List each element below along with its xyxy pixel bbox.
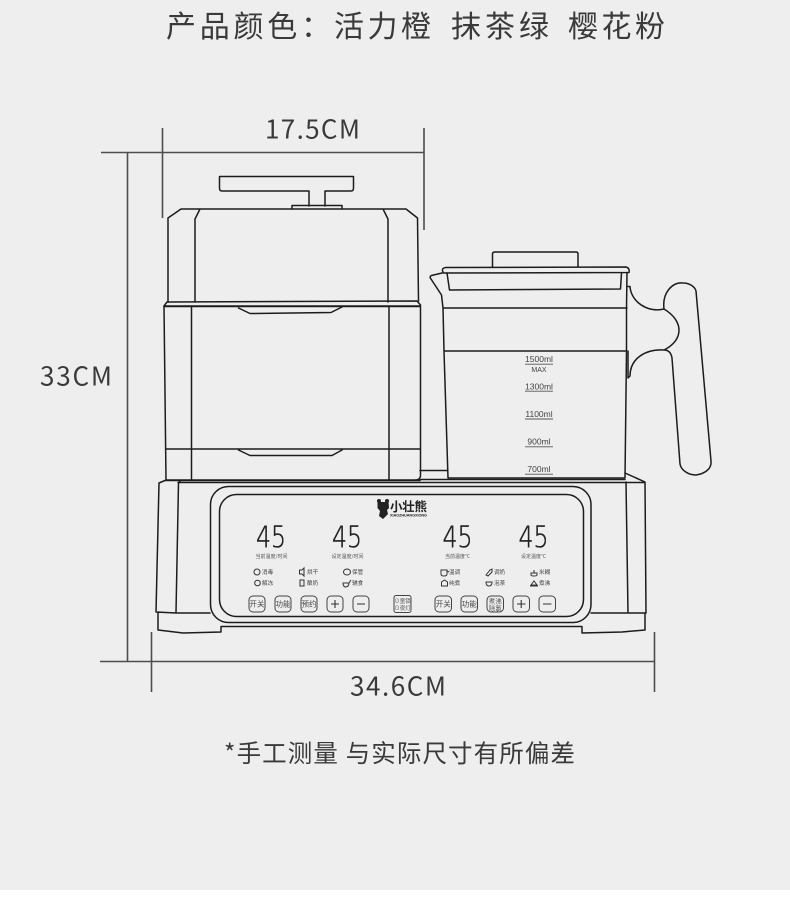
left control buttons: 预约 — [302, 598, 316, 610]
title: product colours: 抹茶绿 — [451, 2, 549, 46]
kettle lid — [442, 252, 629, 273]
measuring scale: 1100ml — [525, 409, 553, 419]
steamer lid — [168, 209, 418, 302]
control panel frame — [210, 486, 591, 622]
function labels: 酿奶 — [307, 579, 319, 587]
brand logo: XIAOZHUANGXIONG — [390, 514, 427, 518]
function labels: 米糊 — [539, 568, 551, 576]
function labels: 调奶 — [494, 568, 506, 576]
readout captions: 设定温度℃ — [521, 553, 546, 560]
title: product colours: 活力橙 — [334, 2, 431, 46]
function labels: 煮沸 — [539, 579, 551, 587]
function labels: 消毒 — [262, 568, 274, 576]
measuring scale: 1300ml — [525, 382, 553, 392]
base housing — [156, 470, 646, 633]
dimension label: total width 34.6CM: 34.6CM — [350, 666, 446, 704]
brand logo — [377, 496, 427, 519]
readout captions: 当前温度℃ — [445, 553, 470, 560]
function labels: 泡茶 — [494, 579, 506, 587]
steamer unit — [164, 176, 420, 480]
child lock and night light button — [394, 596, 411, 612]
readout captions: 设定温度/时间 — [332, 553, 363, 560]
measuring scale: 900ml — [527, 437, 551, 447]
function labels: 保管 — [352, 568, 364, 576]
temperature readouts — [256, 520, 548, 554]
note: manual measurement: *手工测量 与实际尺寸有所偏差 — [224, 735, 575, 770]
dimension lines — [100, 128, 654, 692]
kettle body — [430, 273, 627, 478]
temperature readouts: 45 — [332, 520, 362, 554]
measuring scale — [525, 354, 553, 474]
kettle handle — [628, 283, 711, 475]
left control buttons: 功能 — [276, 598, 291, 610]
temperature readouts: 45 — [442, 520, 472, 554]
brand logo: 小壮熊 — [390, 496, 427, 515]
function labels: 辅食 — [352, 579, 364, 587]
measuring scale: 1500ml — [525, 354, 553, 364]
function labels: 烘干 — [307, 568, 319, 576]
measuring scale: MAX — [531, 367, 547, 374]
temperature readouts: 45 — [518, 520, 548, 554]
steamer lower box — [164, 306, 420, 480]
title: product colours: 产品颜色： — [166, 2, 331, 46]
control panel display — [220, 494, 584, 616]
function icons — [254, 568, 538, 587]
dimension label: width 17.5CM: 17.5CM — [265, 110, 360, 146]
dimension label: height 33CM: 33CM — [40, 356, 112, 394]
title: product colours: 樱花粉 — [568, 2, 665, 46]
function labels: 纯煮 — [449, 579, 461, 587]
function labels: 解冻 — [262, 579, 274, 587]
function labels: 温调 — [449, 568, 461, 576]
steamer lid handle — [220, 176, 354, 209]
left control buttons: 开关 — [250, 598, 265, 610]
right control buttons: 开关 — [436, 598, 451, 610]
right control buttons: 功能 — [462, 598, 477, 610]
readout captions — [256, 553, 546, 560]
base unit — [156, 470, 646, 633]
child lock and night light button: ⊙童锁 — [394, 597, 411, 605]
right control buttons: 除氯 — [489, 602, 502, 612]
function labels — [262, 568, 551, 587]
right control buttons — [435, 596, 556, 612]
kettle — [430, 252, 711, 478]
readout captions: 当前温度/时间 — [256, 553, 287, 560]
steamer divider band — [164, 301, 420, 306]
left control buttons — [249, 596, 369, 612]
child lock and night light button: ⊙夜灯 — [394, 604, 411, 612]
measuring scale: 700ml — [527, 464, 551, 474]
temperature readouts: 45 — [256, 520, 286, 554]
right control buttons: 煮沸 — [489, 596, 502, 606]
